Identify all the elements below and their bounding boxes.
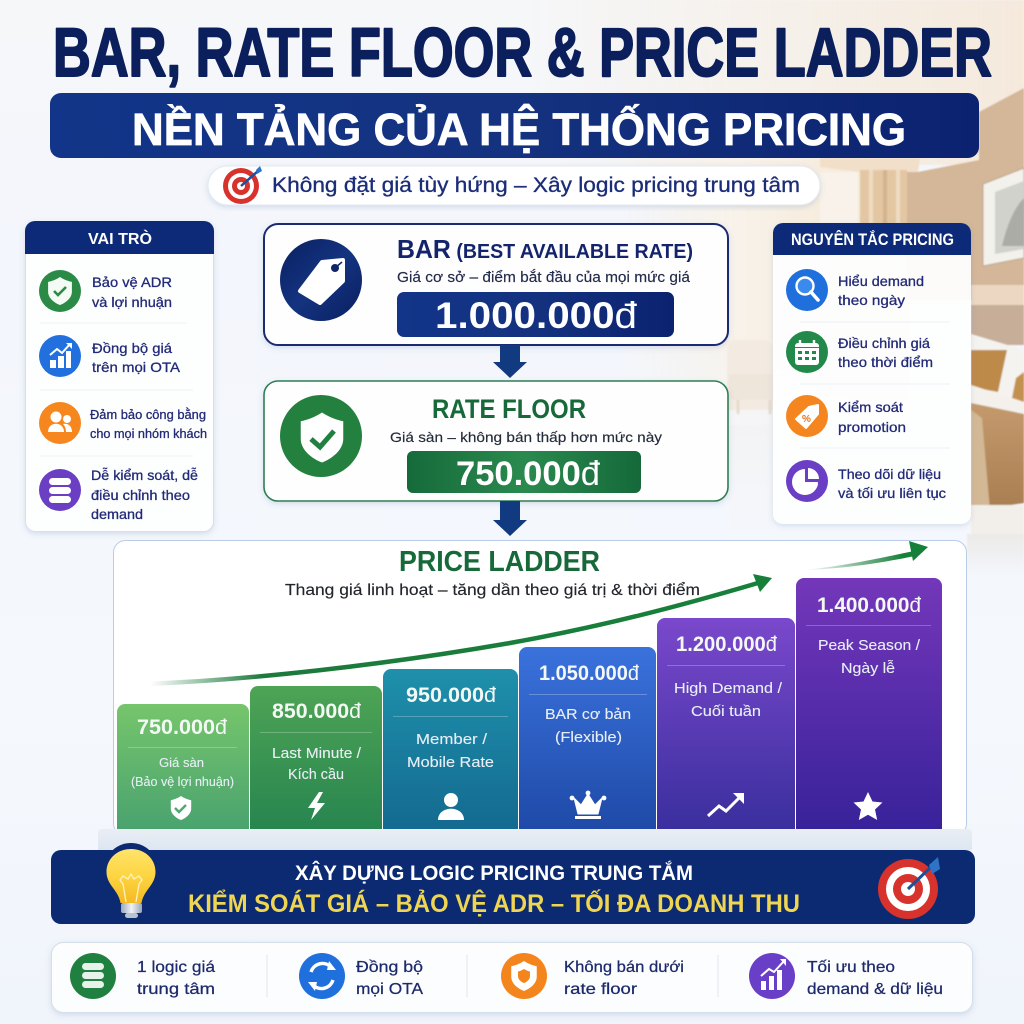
step: 850.000đ: Kích cầu — [288, 766, 344, 783]
step: 750.000đ: Giá sàn — [159, 755, 204, 770]
subtitle banner — [50, 93, 979, 158]
benefit: không bán dưới rate floor: rate floor — [564, 981, 638, 998]
benefit: tối ưu theo demand — [749, 953, 943, 999]
item: dễ kiểm soát: điều chỉnh theo — [91, 487, 190, 503]
icon: trend arrow — [708, 793, 744, 816]
arrow: BAR to rate floor — [493, 345, 527, 378]
step: 1.400.000đ: Peak Season / — [818, 637, 921, 654]
benefit: đồng bộ: mọi OTA — [356, 981, 423, 998]
benefit: 1 logic giá — [70, 953, 215, 999]
panel header — [25, 221, 214, 254]
step: 1.050.000đ: 1.050.000đ — [539, 662, 639, 685]
item: bảo vệ ADR: và lợi nhuận — [92, 294, 172, 310]
panel header — [773, 223, 971, 255]
item: kiểm soát promotion: promotion — [838, 419, 906, 435]
panel: price ladder — [114, 540, 966, 836]
item: đồng bộ giá: Đồng bộ giá — [92, 340, 172, 356]
item: điều chỉnh giá: Điều chỉnh giá — [838, 335, 930, 351]
benefit: tối ưu theo demand: Tối ưu theo — [807, 959, 895, 976]
panel: nguyên tắc pricing — [773, 223, 971, 524]
item: hiểu demand: theo ngày — [838, 292, 905, 308]
arrow: rate floor to ladder — [493, 501, 527, 536]
card: rate floor — [264, 381, 728, 501]
step: 1.050.000đ: BAR cơ bản — [545, 706, 631, 723]
background: hotel room photo — [629, 0, 1024, 560]
panel header: NGUYÊN TẮC PRICING — [791, 230, 954, 249]
icon: target — [878, 857, 940, 919]
panel header: VAI TRÒ — [88, 229, 152, 248]
benefit: tối ưu theo demand: demand & dữ liệu — [807, 981, 943, 998]
item: đồng bộ giá: trên mọi OTA — [92, 359, 181, 375]
benefit: đồng bộ — [299, 953, 423, 999]
item: kiểm soát promotion — [786, 395, 906, 437]
panel: vai trò — [25, 221, 214, 532]
benefit: đồng bộ: Đồng bộ — [356, 959, 423, 976]
subtitle banner: NỀN TẢNG CỦA HỆ THỐNG PRICING — [132, 104, 906, 155]
step: 1.200.000đ: 1.200.000đ — [676, 633, 777, 656]
icon: shield — [171, 796, 191, 820]
item: hiểu demand — [786, 269, 924, 311]
value: BAR price: 1.000.000 đ — [435, 295, 637, 336]
step: 950.000đ: Mobile Rate — [407, 754, 494, 771]
item: theo dõi dữ liệu: Theo dõi dữ liệu — [838, 466, 941, 482]
step: 1.050.000đ: (Flexible) — [555, 729, 622, 746]
step: 1.200.000đ: Cuối tuần — [691, 703, 761, 720]
banner line 1: XÂY DỰNG LOGIC PRICING TRUNG TẮM — [295, 861, 693, 885]
icon: person — [438, 793, 464, 820]
step: 950.000đ: 950.000đ — [406, 684, 496, 707]
item: bảo vệ ADR — [39, 270, 172, 312]
step: 1.400.000đ: Ngày lễ — [841, 660, 895, 677]
icon: shield — [280, 395, 362, 477]
step: 850.000đ — [250, 686, 382, 829]
step: 1.400.000đ — [796, 578, 942, 829]
icon: crown — [570, 791, 606, 819]
item: điều chỉnh giá — [786, 331, 933, 373]
item: bảo vệ ADR: Bảo vệ ADR — [92, 274, 172, 290]
value: floor price: 750.000đ — [456, 455, 600, 493]
item: theo dõi dữ liệu — [786, 460, 946, 502]
tagline pill — [208, 166, 820, 205]
item: đảm bảo công bằng — [39, 402, 207, 444]
step: 750.000đ: (Bảo vệ lợi nhuận) — [131, 774, 234, 789]
arrow: growth curve — [145, 574, 772, 684]
value: floor price — [407, 451, 641, 493]
card: BAR — [264, 224, 728, 345]
step: 750.000đ: 750.000đ — [137, 716, 227, 739]
card description: Giá sàn – không bán thấp hơn mức này — [390, 429, 662, 445]
benefit: 1 logic giá: trung tâm — [137, 981, 215, 998]
step: 950.000đ: Member / — [416, 731, 488, 748]
ladder heading: PRICE LADDER — [399, 546, 600, 578]
item: dễ kiểm soát — [39, 467, 198, 522]
icon: star — [854, 792, 882, 820]
step: 1.400.000đ: 1.400.000đ — [817, 594, 921, 617]
bottom banner — [51, 843, 975, 924]
card heading: BAR (BEST AVAILABLE RATE) — [397, 234, 693, 264]
item: kiểm soát promotion: % — [802, 414, 811, 425]
item: đồng bộ giá — [39, 335, 181, 377]
benefit: 1 logic giá: 1 logic giá — [137, 959, 215, 976]
benefit: không bán dưới rate floor: Không bán dưới — [564, 959, 684, 976]
step: 850.000đ: Last Minute / — [272, 745, 362, 762]
icon: lightning — [308, 792, 325, 820]
step: 750.000đ — [117, 704, 249, 829]
item: dễ kiểm soát: Dễ kiểm soát, dễ — [91, 467, 198, 483]
step: 1.050.000đ — [519, 647, 656, 829]
item: đảm bảo công bằng: Đảm bảo công bằng — [90, 407, 206, 422]
icon: price tag — [280, 239, 362, 321]
ladder description: Thang giá linh hoạt – tăng dần theo giá trị & thời điểm — [285, 581, 700, 599]
item: đảm bảo công bằng: cho mọi nhóm khách — [90, 426, 207, 441]
step: 950.000đ — [383, 669, 518, 829]
benefit: không bán dưới rate floor — [501, 953, 684, 999]
tagline pill: Không đặt giá tùy hứng – Xây logic pricing trung tâm — [272, 174, 800, 197]
step: 850.000đ: 850.000đ — [272, 700, 361, 723]
card description: Giá cơ sở – điểm bắt đầu của mọi mức giá — [397, 269, 691, 286]
value: BAR price — [397, 292, 674, 337]
item: hiểu demand: Hiểu demand — [838, 273, 924, 289]
step: 1.200.000đ — [657, 618, 795, 829]
icon: light bulb — [104, 843, 158, 918]
bottom benefits strip — [52, 942, 972, 1012]
step: 1.200.000đ: High Demand / — [674, 680, 783, 697]
item: theo dõi dữ liệu: và tối ưu liên tục — [838, 485, 946, 501]
card heading: RATE FLOOR — [432, 394, 586, 424]
banner line 2: KIỂM SOÁT GIÁ – BẢO VỆ ADR – TỐI ĐA DOANH THU — [188, 888, 800, 918]
icon: target — [223, 166, 262, 204]
ladder base shelf — [98, 829, 972, 850]
item: dễ kiểm soát: demand — [91, 506, 143, 522]
item: điều chỉnh giá: theo thời điểm — [838, 354, 933, 370]
item: kiểm soát promotion: Kiểm soát — [838, 399, 903, 415]
arrow: growth curve continued — [805, 541, 928, 570]
